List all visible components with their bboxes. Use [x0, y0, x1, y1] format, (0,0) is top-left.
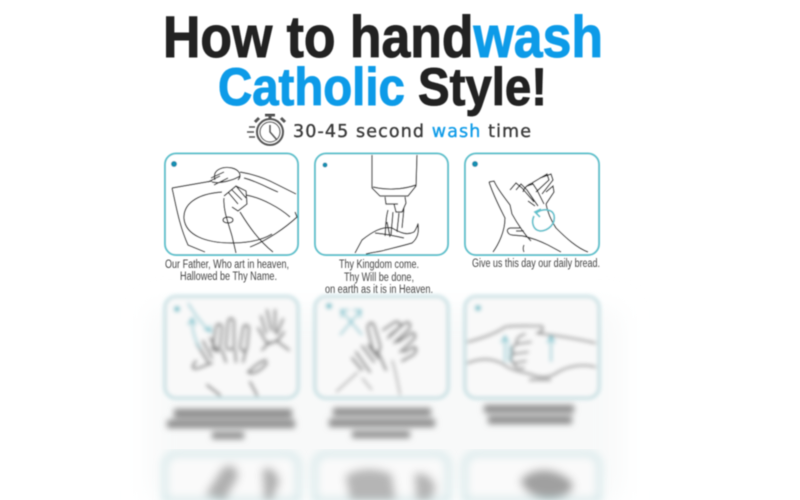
step number 5 [475, 305, 481, 311]
panel: step 0 [165, 154, 298, 255]
icon: blurred hands [205, 465, 280, 500]
panel: step 2 [465, 154, 599, 255]
arrows: finger motion [188, 303, 211, 349]
blurred caption: step 3 [167, 409, 295, 439]
blurred caption: step 5 [484, 405, 574, 424]
arrow: circular motion [533, 209, 554, 231]
icon: crossed hands [352, 322, 416, 372]
subtitle: 30-45 second wash time [293, 122, 531, 142]
title line 1: How to handwash [163, 5, 603, 70]
step number 3 [174, 306, 180, 312]
caption: step 2: Give us this day our daily bread. [472, 258, 600, 270]
icon: fist in palm [468, 326, 595, 380]
icon: blurred hands [345, 469, 436, 500]
caption: step 0: Hallowed be Thy Name. [180, 271, 277, 283]
icon: fingers interlaced [193, 310, 289, 395]
step number 2 [472, 161, 478, 167]
icon: blurred hands [520, 470, 573, 498]
title line 2: Catholic Style! [218, 58, 547, 117]
icon: stopwatch [247, 115, 285, 145]
panel: step 6 [165, 454, 298, 500]
caption: step 1: Thy Kingdom come. [339, 259, 419, 271]
caption: step 0 [165, 259, 289, 283]
caption: step 1 [325, 259, 433, 296]
panel: step 1 [315, 154, 448, 255]
icon: soap dispenser and hand [355, 155, 418, 254]
panel: step 8 [465, 454, 599, 500]
blurred caption: step 4 [329, 408, 435, 438]
arrows: rotation [501, 336, 555, 362]
icon: hands under tap at sink [172, 168, 297, 253]
caption: step 0: Our Father, Who art in heaven, [165, 259, 289, 271]
panel: step 5 [465, 296, 599, 398]
caption: step 1: Thy Will be done, [344, 272, 414, 284]
step number 4 [326, 303, 332, 309]
step number 0 [171, 161, 177, 167]
icon: crossed wrists [336, 360, 400, 395]
icon: palm rubbing hands [489, 174, 588, 252]
step number 1 [322, 162, 328, 168]
panel: step 4 [315, 296, 448, 398]
arrows: crossed motion [340, 310, 362, 335]
panel: step 3 [165, 296, 298, 398]
caption: step 1: on earth as it is in Heaven. [325, 284, 433, 296]
panel: step 7 [315, 454, 448, 500]
title [163, 5, 603, 117]
